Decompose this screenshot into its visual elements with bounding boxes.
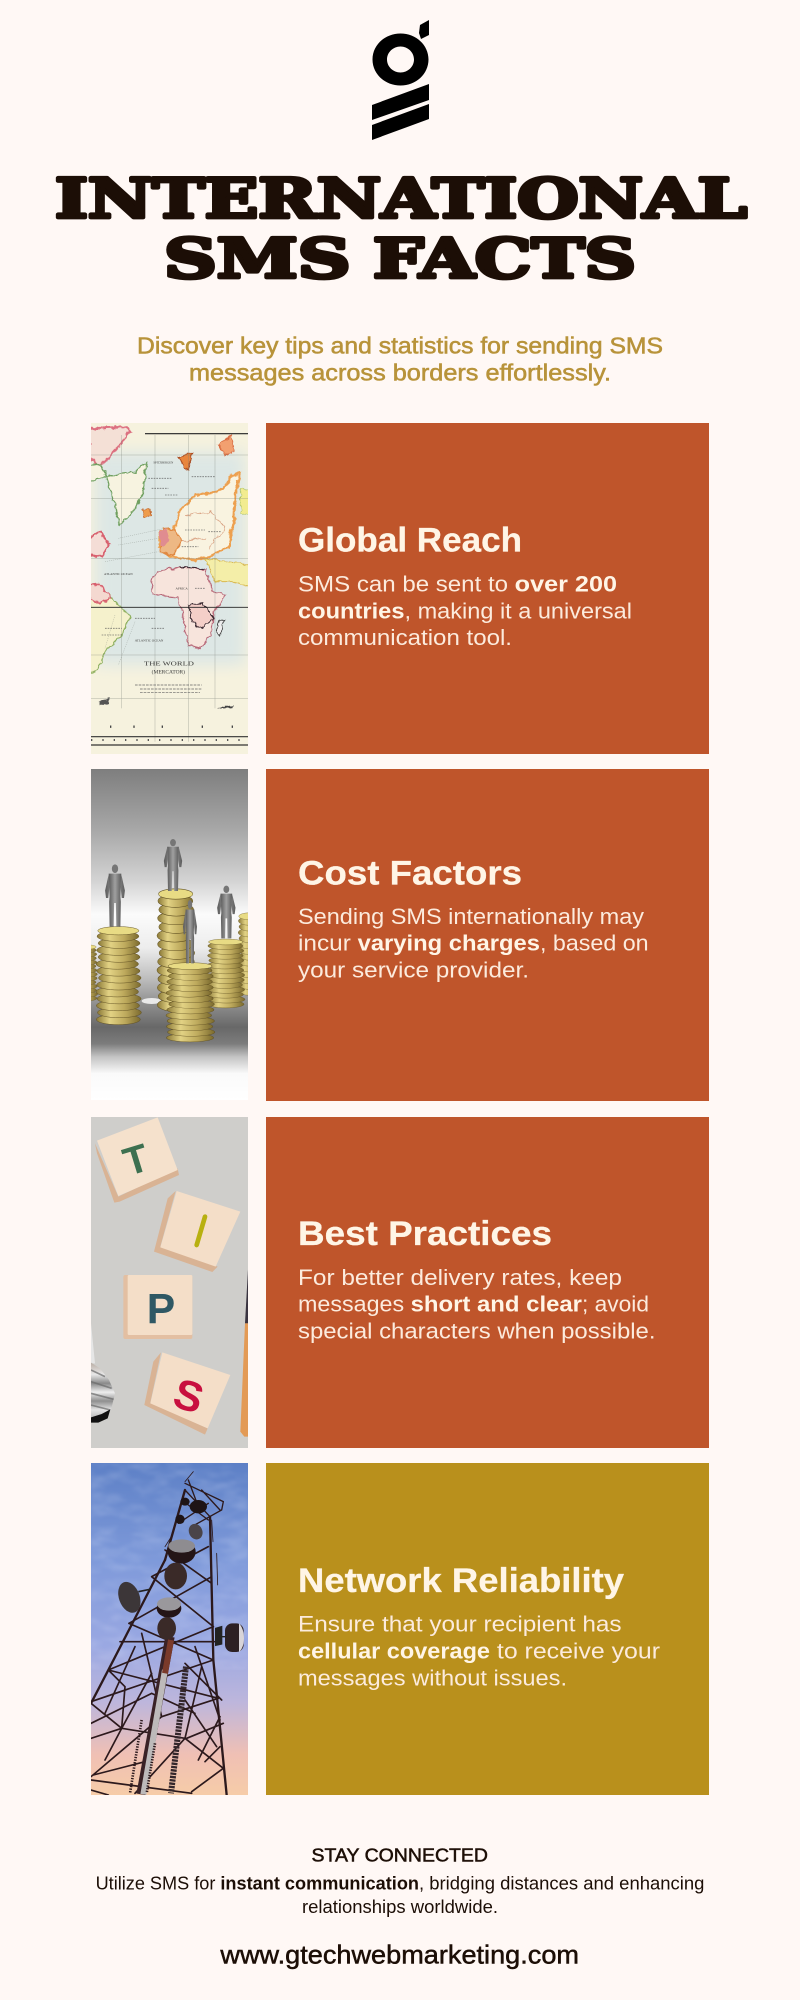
- footer heading: STAY CONNECTED: [312, 1845, 488, 1866]
- image: TIPS wooden blocks: [91, 1117, 248, 1448]
- body: network reliability: cellular coverage: [298, 1639, 490, 1664]
- heading: best practices: Best Practices: [298, 1215, 552, 1253]
- title: [55, 166, 747, 290]
- body: global reach: countries: [298, 598, 404, 624]
- body: best practices: short and clear: [411, 1292, 582, 1317]
- footer text: instant communication: [220, 1873, 419, 1893]
- image: coin stacks and people: [91, 769, 248, 1100]
- block S: [144, 1352, 230, 1435]
- panel: cost factors: [266, 769, 709, 1101]
- block P: P: [147, 1285, 175, 1333]
- block T: [95, 1117, 179, 1203]
- body: global reach: [298, 572, 632, 650]
- body: best practices: ; avoid: [582, 1292, 649, 1317]
- image: vintage world map: [88, 423, 250, 754]
- heading: network reliability: Network Reliability: [298, 1562, 624, 1600]
- central mast: [130, 1637, 186, 1794]
- body: best practices: special characters when possible.: [298, 1318, 656, 1344]
- heading: cost factors: Cost Factors: [298, 854, 522, 892]
- subtitle: [137, 332, 663, 386]
- body: cost factors: varying charges: [358, 931, 540, 956]
- block T: T: [118, 1136, 154, 1185]
- body: cost factors: Sending SMS internationally may: [298, 904, 644, 929]
- pencil: [240, 1269, 248, 1437]
- block S: S: [168, 1369, 209, 1424]
- body: cost factors: [298, 904, 649, 982]
- website url: www.gtechwebmarketing.com: [219, 1940, 579, 1970]
- footer text: relationships worldwide.: [302, 1897, 498, 1917]
- body: global reach: , making it a universal: [404, 598, 632, 624]
- image: vintage world map: ATLANTIC OCEAN: [104, 572, 133, 576]
- subtitle: Discover key tips and statistics for sending SMS: [137, 332, 663, 358]
- body: network reliability: [298, 1612, 660, 1691]
- footer text: Utilize SMS for: [96, 1873, 220, 1893]
- body: cost factors: , based on: [540, 931, 649, 956]
- body: best practices: messages: [298, 1292, 411, 1317]
- footer text: , bridging distances and enhancing: [419, 1873, 704, 1893]
- dishes: [114, 1498, 244, 1652]
- body: global reach: communication tool.: [298, 625, 512, 650]
- body: best practices: For better delivery rates, keep: [298, 1265, 622, 1290]
- body: network reliability: to receive your: [490, 1639, 660, 1664]
- image: telecom tower at dusk: [91, 1463, 248, 1795]
- subtitle: messages across borders effortlessly.: [189, 360, 611, 386]
- image: vintage world map: THE WORLD: [144, 661, 194, 668]
- image: vintage world map: (MERCATOR): [152, 670, 185, 675]
- image: vintage world map: SPITZBERGEN: [153, 460, 174, 464]
- body: network reliability: messages without issues.: [298, 1666, 567, 1691]
- heading: global reach: Global Reach: [298, 522, 522, 560]
- panel: network reliability: [266, 1463, 709, 1795]
- body: global reach: over 200: [515, 572, 617, 597]
- body: cost factors: incur: [298, 931, 358, 956]
- body: global reach: SMS can be sent to: [298, 572, 515, 597]
- body: cost factors: your service provider.: [298, 958, 529, 982]
- icon: brand logo: [372, 20, 429, 140]
- title: FACTS: [373, 226, 636, 290]
- panel: best practices: [266, 1117, 709, 1448]
- block P: [123, 1275, 192, 1339]
- body: best practices: [298, 1265, 656, 1344]
- image: vintage world map: ATLANTIC OCEAN: [135, 639, 164, 643]
- body: network reliability: Ensure that your recipient has: [298, 1612, 622, 1637]
- panel: global reach: [266, 423, 709, 754]
- title: SMS: [164, 226, 376, 290]
- block I: [154, 1191, 240, 1272]
- title: INTERNATIONAL: [55, 166, 747, 230]
- footer text: [96, 1873, 704, 1917]
- image: vintage world map: AFRICA: [176, 586, 188, 590]
- light bulb base: [91, 1323, 115, 1423]
